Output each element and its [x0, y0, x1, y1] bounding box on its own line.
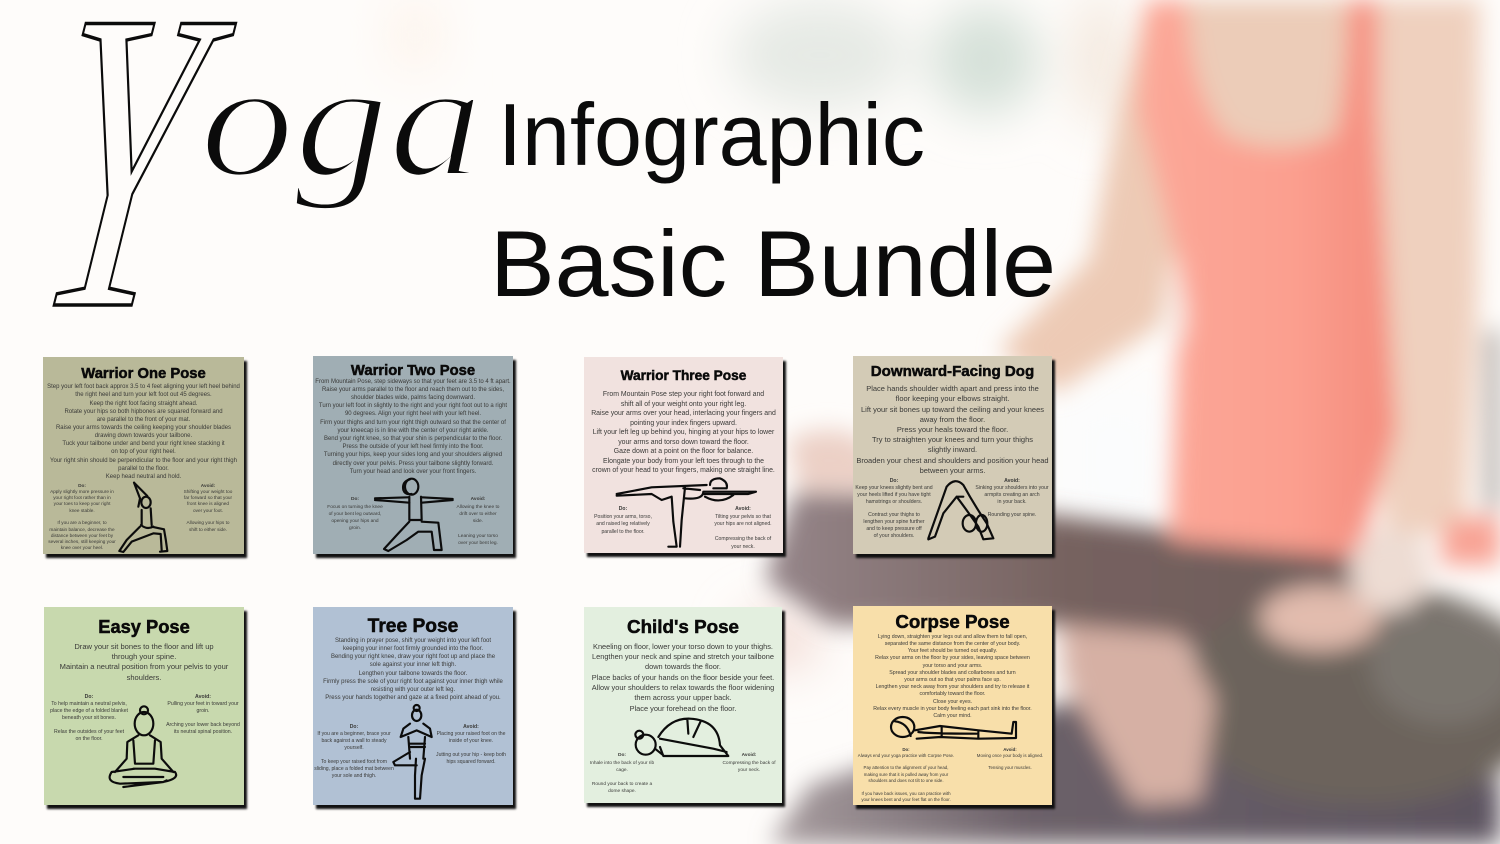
avoid list: hips squared forward. [446, 759, 495, 765]
avoid list: Avoid: [1004, 478, 1020, 484]
avoid list: Placing your raised foot on the [437, 731, 505, 737]
do list: your heels lifted if you have tight [857, 492, 931, 498]
instructions: Your feet should be turned out equally. [908, 648, 997, 654]
do list: maintain balance, decrease the [49, 527, 115, 532]
heading: Corpse Pose [895, 611, 1010, 632]
do list: parallel to the floor. [601, 528, 645, 534]
instructions: Close your eyes. [933, 699, 972, 705]
icon: corpse pose figure [890, 716, 1018, 740]
instructions: your arms and torso down toward the floor. [618, 439, 749, 446]
avoid list: your hips are not aligned. [714, 521, 772, 527]
avoid list: Avoid: [742, 753, 756, 758]
avoid list [714, 506, 772, 550]
do list: Inhale into the back of your rib [590, 761, 654, 766]
instructions: From Mountain Pose step your right foot forward and [603, 391, 764, 398]
instructions [856, 384, 1049, 475]
instructions: Lengthen your neck and spine and stretch your tailbone [592, 652, 774, 661]
instructions: 90 degrees. Align your right heel with your left heel. [345, 411, 481, 417]
avoid list: Avoid: [195, 694, 211, 700]
instructions [873, 634, 1032, 719]
do list: Do: [619, 506, 627, 512]
icon: child's pose figure [634, 718, 730, 758]
do list: several inches, still keeping your [48, 539, 116, 544]
do list: cage. [616, 768, 628, 773]
instructions: your torso and your arms. [923, 662, 982, 668]
script word: Yoga [17, 0, 483, 399]
avoid list: far forward so that your [184, 495, 232, 500]
avoid list: drift over to either [459, 512, 497, 517]
do list: place the edge of a folded blanket [50, 708, 128, 714]
instructions: directly over your pelvis. Press your tailbone slightly forward. [333, 461, 493, 467]
do list: Contract your thighs to [868, 512, 920, 518]
panel: Tree Pose [313, 607, 513, 805]
do list: Do: [78, 482, 86, 488]
do list [314, 724, 394, 779]
avoid list: Compressing the back of [722, 761, 776, 766]
instructions: shoulder blades wide, palms facing downward. [351, 395, 475, 401]
instructions: Raise your arms over your head, interlacing your fingers and [591, 410, 776, 417]
icon: warrior one figure [118, 482, 168, 554]
do list: and raised leg relatively [596, 521, 650, 527]
instructions: Place your forehead on the floor. [630, 704, 736, 713]
instructions: Firmly press the sole of your right foot against your inner thigh while [323, 679, 503, 685]
avoid list: Jutting out your hip - keep both [436, 752, 506, 758]
instructions: From Mountain Pose, step sideways so that your feet are 3.5 to 4 ft apart. [315, 379, 511, 385]
instructions: Relax every muscle in your body feeling each part sink into the floor. [873, 706, 1032, 712]
instructions: Turn your head and look over your front fingers. [350, 469, 476, 475]
do list: Do: [350, 724, 358, 730]
instructions: down towards the floor. [645, 662, 721, 671]
do list: making sure that it is pulled away from your [864, 772, 948, 777]
instructions: shift all of your weight onto your right leg. [621, 401, 746, 408]
avoid list: Shifting your weight too [184, 489, 232, 494]
do list: knee over your heel. [61, 545, 103, 550]
instructions: Place backs of your hands on the floor beside your feet. [592, 673, 774, 682]
instructions: Allow your shoulders to relax towards the floor widening [592, 683, 774, 692]
avoid list: Avoid: [471, 497, 485, 502]
instructions: crown of your head to your fingers, making one straight line. [592, 467, 775, 474]
do list: your knees bent and your feet flat on the floor. [861, 797, 951, 802]
instructions: through your spine. [112, 652, 176, 661]
avoid list: Tensing your muscles. [988, 765, 1032, 770]
instructions: resisting with your outer left leg. [371, 687, 455, 693]
instructions: Lengthen your neck away from your shoulders and try to release it [876, 684, 1029, 690]
instructions [592, 642, 774, 713]
icon: downward dog figure [927, 480, 994, 540]
panel: Corpse Pose [853, 606, 1052, 805]
do list: Pay attention to the alignment of your head, [864, 765, 948, 770]
do list: hamstrings or shoulders. [866, 499, 922, 505]
do list: Do: [351, 497, 359, 502]
do list: Do: [902, 746, 910, 752]
instructions: Spread your shoulder blades and collarbones and turn [889, 670, 1016, 676]
avoid list: side. [473, 519, 483, 524]
avoid list: its neutral spinal position. [174, 728, 232, 734]
instructions: Turn your left foot in slightly to the right and your right foot out to a right [319, 403, 507, 409]
instructions: Kneeling on floor, lower your torso down to your thighs. [593, 642, 773, 651]
instructions: floor keeping your elbows straight. [896, 394, 1009, 403]
do list: To help maintain a neutral pelvis, [51, 700, 127, 706]
avoid list: Arching your lower back beyond [166, 722, 240, 728]
panel: Easy Pose [44, 607, 244, 805]
instructions: Press the outside of your left heel firmly into the floor. [342, 444, 484, 450]
instructions: Gaze down at a point on the floor for balance. [614, 448, 753, 455]
do list: sliding, place a folded mat between [314, 766, 394, 772]
avoid list: Allowing your hips to [186, 520, 230, 525]
instructions: Draw your sit bones to the floor and lift up [74, 642, 214, 651]
instructions: pointing your index fingers upward. [630, 420, 737, 427]
do list: Do: [890, 478, 898, 484]
do list [50, 694, 128, 742]
instructions: between your arms. [920, 466, 985, 475]
do list: To keep your raised foot from [321, 759, 387, 765]
instructions: Press your hands together and gaze at a fixed point ahead of you. [325, 695, 501, 701]
do list: dome shape. [608, 789, 636, 794]
panel: Warrior One Pose [43, 357, 244, 554]
instructions: Keep the right foot facing straight ahead. [89, 400, 198, 406]
instructions: Step your left foot back approx 3.5 to 4 feet aligning your left heel behind [47, 384, 240, 390]
avoid list: over your foot. [193, 508, 223, 513]
instructions: Raise your arms parallel to the floor and reach them out to the sides, [322, 387, 504, 393]
avoid list: Avoid: [463, 724, 479, 730]
do list: If you are a beginner, brace your [317, 731, 391, 737]
do list: If you are a beginner, to [57, 520, 107, 525]
instructions [591, 390, 776, 474]
instructions: Try to straighten your knees and turn your thighs [872, 435, 1033, 444]
instructions: comfortably toward the floor. [920, 691, 985, 697]
avoid list [722, 752, 776, 773]
instructions [315, 378, 511, 475]
avoid list: Rounding your spine. [988, 512, 1036, 518]
heading: Downward-Facing Dog [871, 363, 1034, 380]
do list: distance between your feet by [51, 533, 113, 538]
do list [48, 482, 116, 550]
avoid list [184, 482, 232, 532]
do list: your toes to keep your right [54, 501, 110, 506]
do list: Do: [618, 753, 626, 758]
do list: shoulders and does not tilt to one side. [868, 778, 944, 783]
heading: Easy Pose [98, 616, 190, 637]
instructions: drawing down towards your tailbone. [95, 433, 192, 439]
avoid list: Avoid: [735, 506, 751, 512]
instructions: parallel to the floor. [118, 466, 169, 472]
do list: Do: [85, 694, 93, 700]
instructions: your kneecap is in line with the center of your right ankle. [337, 428, 489, 434]
do list: Focus on turning the knee [327, 505, 383, 510]
instructions: Maintain a neutral position from your pelvis to your [60, 662, 228, 671]
heading: Tree Pose [368, 616, 458, 637]
do list: your sole and thigh. [332, 773, 376, 779]
do list: of your shoulders. [874, 533, 914, 539]
avoid list [436, 724, 506, 765]
instructions [323, 638, 503, 701]
do list: knee stable. [69, 508, 95, 513]
icon: warrior two figure [374, 478, 454, 552]
icon: tree pose figure [392, 704, 433, 800]
instructions: Lift your left leg up behind you, hinging at your hips to lower [593, 429, 774, 436]
avoid list: Pulling your feet in toward your [167, 700, 239, 706]
avoid list: Avoid: [1003, 746, 1017, 752]
instructions: Bend your right knee, so that your shin is perpendicular to the floor. [324, 436, 502, 442]
instructions: the right heel and turn your left foot out 45 degrees. [75, 392, 212, 398]
panel: Child's Pose [584, 607, 782, 803]
instructions: are parallel to the front of your mat. [97, 417, 190, 423]
avoid list: Compressing the back of [715, 536, 771, 542]
panel: Downward-Facing Dog [853, 356, 1052, 554]
instructions: Raise your arms towards the ceiling keeping your shoulder blades [56, 425, 231, 431]
instructions: them across your upper back. [634, 693, 732, 702]
do list: yourself. [344, 745, 364, 751]
do list: back against a wall to steady [321, 738, 387, 744]
heading line: Basic Bundle: Basic Bundle [490, 211, 1056, 316]
do list: Relax the outsides of your feet [54, 728, 124, 734]
do list: beneath your sit bones. [62, 714, 116, 720]
do list: Keep your knees slightly bent and [855, 485, 933, 491]
instructions [60, 642, 228, 682]
instructions: Firm your thighs and turn your right thigh outward so that the center of [320, 420, 506, 426]
instructions: your arms out so that your palms face up. [904, 677, 1001, 683]
instructions: Your right shin should be perpendicular to the floor and your right thigh [50, 458, 237, 464]
heading: Child's Pose [627, 616, 739, 637]
do list [858, 746, 954, 802]
avoid list: over your bent leg. [458, 541, 498, 546]
instructions: Relax your arms on the floor by your sides, leaving space between [875, 655, 1030, 661]
avoid list: inside of your knee. [449, 738, 493, 744]
avoid list: your neck. [731, 544, 755, 550]
instructions: on top of your right heel. [111, 449, 176, 455]
do list: If you have back issues, you can practice with [861, 791, 951, 796]
icon: easy pose figure [108, 705, 178, 788]
instructions: separated the same distance from the center of your body. [885, 641, 1020, 647]
do list: of your bent leg outward, [329, 512, 381, 517]
avoid list: Allowing the knee to [457, 505, 499, 510]
do list: lengthen your spine further [863, 519, 925, 525]
panel: Warrior Three Pose [584, 357, 783, 553]
icon: warrior three figure [616, 477, 758, 548]
avoid list [456, 496, 500, 546]
do list [590, 753, 654, 794]
do list: Always end your yoga practice with Corpse Pose. [858, 753, 954, 758]
instructions: sole against your inner left thigh. [370, 662, 456, 668]
script word: Yoga: oga [200, 28, 483, 211]
avoid list [166, 694, 240, 734]
do list: Round your back to create a [592, 782, 652, 787]
instructions: Broaden your chest and shoulders and position your head [856, 456, 1049, 465]
instructions: Standing in prayer pose, shift your weight into your left foot [335, 638, 491, 644]
instructions: Place hands shoulder width apart and press into the [866, 384, 1039, 393]
do list [855, 478, 933, 539]
instructions: slightly inward. [928, 445, 977, 454]
heading: Warrior Three Pose [621, 368, 746, 383]
avoid list: Moving once your body is aligned. [977, 753, 1043, 758]
instructions [47, 384, 240, 480]
panel: Warrior Two Pose [313, 356, 513, 554]
do list: on the floor. [75, 736, 103, 742]
avoid list: groin. [196, 708, 209, 714]
do list: Position your arms, torso, [594, 514, 652, 520]
avoid list: Sinking your shoulders into your [975, 485, 1049, 491]
title [17, 0, 1056, 340]
instructions: Lift your sit bones up toward the ceiling and your knees [861, 405, 1044, 414]
instructions: keeping your inner foot firmly grounded into the floor. [343, 646, 483, 652]
do list: and to keep pressure off [866, 526, 922, 532]
instructions: shoulders. [127, 673, 161, 682]
instructions: Elongate your body from your left toes through to the [603, 458, 764, 465]
do list [327, 497, 383, 531]
do list [594, 506, 652, 534]
do list: your right foot rather than in [53, 495, 111, 500]
avoid list: Leaning your torso [458, 534, 498, 539]
instructions: Press your heals toward the floor. [897, 425, 1008, 434]
avoid list [975, 478, 1049, 518]
do list: Apply slightly more pressure in [50, 489, 114, 494]
do list: opening your hips and [331, 519, 379, 524]
avoid list: Avoid: [201, 482, 215, 488]
instructions: Keep head neutral and hold. [106, 474, 181, 480]
avoid list: shift to either side. [189, 527, 227, 532]
avoid list: Tilting your pelvis so that [715, 514, 771, 520]
avoid list: your neck. [738, 768, 760, 773]
avoid list: in your back. [997, 499, 1027, 505]
instructions: away from the floor. [920, 415, 985, 424]
instructions: Bending your right knee, draw your right foot up and place the [331, 654, 495, 660]
instructions: Lying down, straighten your legs out and allow them to fall open, [878, 634, 1027, 640]
avoid list: armpits creating an arch [984, 492, 1040, 498]
avoid list [977, 746, 1043, 770]
instructions: Tuck your tailbone under and bend your right knee stacking it [62, 441, 225, 447]
heading: Warrior Two Pose [351, 363, 475, 379]
instructions: Turning your hips, keep your sides long and your shoulders aligned [324, 452, 502, 458]
do list: groin. [349, 526, 361, 531]
avoid list: front knee is aligned [187, 501, 229, 506]
heading line: Infographic: Infographic [498, 85, 925, 184]
heading: Warrior One Pose [81, 366, 206, 382]
instructions: Rotate your hips so both hipbones are squared forward and [64, 409, 223, 415]
instructions: Lengthen your tailbone towards the floor. [359, 671, 467, 677]
instructions: Calm your mind. [933, 713, 972, 719]
